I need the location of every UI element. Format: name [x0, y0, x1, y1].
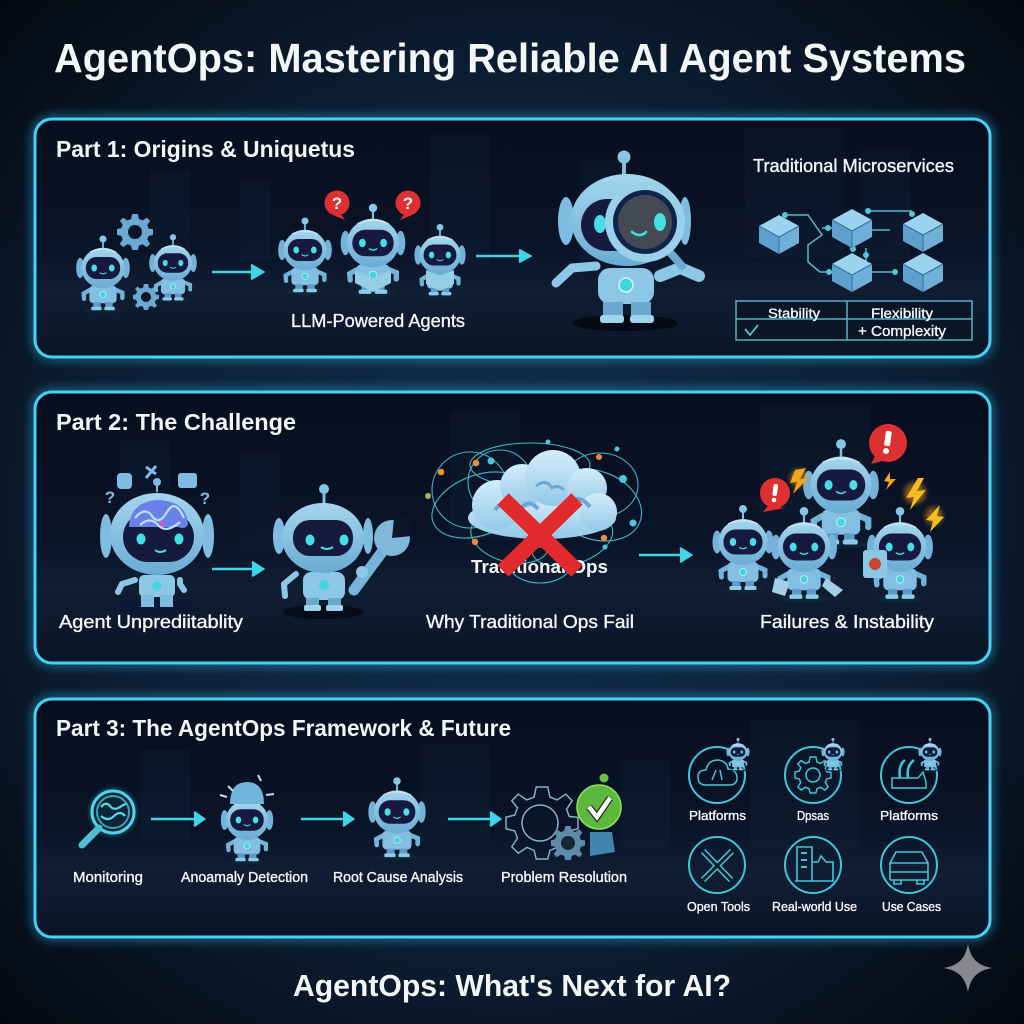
icon: root cause robot	[368, 777, 426, 860]
diagram: microservice cubes	[759, 208, 943, 292]
arrow: brain robot to wrench robot	[212, 562, 263, 576]
item: platforms cloud	[689, 738, 750, 823]
icon: three reading robots with question bubbles	[278, 190, 466, 298]
arrow: root cause to resolution	[448, 812, 500, 826]
item: open tools	[687, 837, 750, 914]
icon: big robot with magnifying glass	[556, 150, 699, 331]
icon: two robots with gears	[76, 214, 197, 313]
icon: three reading robots with question bubbles: ?	[403, 194, 413, 213]
grid: future ecosystem icons	[687, 738, 942, 914]
icon: robot with brain and question marks: ?	[200, 489, 210, 508]
heading: part 2: Part 2: The Challenge	[56, 409, 296, 435]
icon: anomaly detection robot	[220, 775, 274, 864]
heading: part 3: Part 3: The AgentOps Framework & Future	[56, 715, 511, 741]
item: real-world use: Real-world Use	[772, 900, 857, 914]
label: Root Cause Analysis: Root Cause Analysis	[333, 870, 463, 886]
item: platforms vehicle: Platforms	[880, 809, 938, 823]
arrow: robots to LLM agents	[212, 265, 263, 279]
icon: monitoring magnifier	[82, 791, 134, 845]
item: real-world use	[772, 837, 857, 914]
panel: part 2 challenge	[35, 392, 990, 663]
item: ops gear: Dpsas	[797, 809, 829, 823]
icon: robot with brain and question marks: ?	[105, 488, 115, 507]
icon: sparkle watermark	[944, 944, 992, 992]
footer heading: AgentOps: What's Next for AI?	[293, 969, 731, 1003]
icon: three reading robots with question bubbles: ?	[332, 194, 342, 213]
label: Agent Unpredictability: Agent Unprediitablity	[59, 612, 243, 632]
label: Traditional Microservices: Traditional Microservices	[753, 156, 954, 176]
label: Why Traditional Ops Fail: Why Traditional Ops Fail	[426, 612, 634, 632]
table: stability vs flexibility	[736, 301, 972, 340]
label: LLM-Powered Agents: LLM-Powered Agents	[291, 311, 465, 331]
arrow: anomaly detection to root cause	[301, 812, 353, 826]
item: open tools: Open Tools	[687, 900, 750, 914]
panel: part 1 origins	[35, 119, 990, 357]
label: Failures & Instability: Failures & Instability	[760, 612, 934, 632]
icon: cloud with crossed-out traditional ops	[423, 440, 652, 583]
arrow: agents to big robot	[476, 250, 530, 262]
icon: problem resolution gears and check	[506, 774, 621, 860]
title: AgentOps: Mastering Reliable AI Agent Systems	[54, 35, 966, 81]
icon: robot with wrench	[273, 484, 412, 619]
label: Traditional Ops: Traditional Ops	[471, 557, 608, 577]
label: Monitoring: Monitoring	[73, 870, 143, 886]
arrow: monitoring to anomaly detection	[151, 812, 204, 826]
red cross	[503, 499, 577, 571]
panel: part 3 framework	[35, 699, 990, 937]
item: platforms vehicle	[880, 738, 942, 823]
item: platforms cloud: Platforms	[689, 809, 746, 823]
item: ops gear	[785, 738, 845, 823]
table: stability vs flexibility: Stability	[768, 305, 820, 321]
table: stability vs flexibility: Flexibility	[871, 305, 933, 321]
label: Problem Resolution: Problem Resolution	[501, 870, 627, 886]
cloud	[468, 450, 617, 539]
item: use cases car	[881, 837, 941, 914]
item: use cases car: Use Cases	[882, 900, 941, 914]
heading: part 1: Part 1: Origins & Uniquetus	[56, 136, 355, 162]
network orbit lines	[423, 443, 652, 583]
table: stability vs flexibility: + Complexity	[858, 323, 946, 340]
icon: robot with brain and question marks	[100, 466, 214, 614]
icon: failing robots with alerts and sparks	[712, 424, 944, 603]
arrow: ops to failures	[639, 548, 691, 562]
label: Anomaly Detection: Anoamaly Detection	[181, 870, 308, 886]
